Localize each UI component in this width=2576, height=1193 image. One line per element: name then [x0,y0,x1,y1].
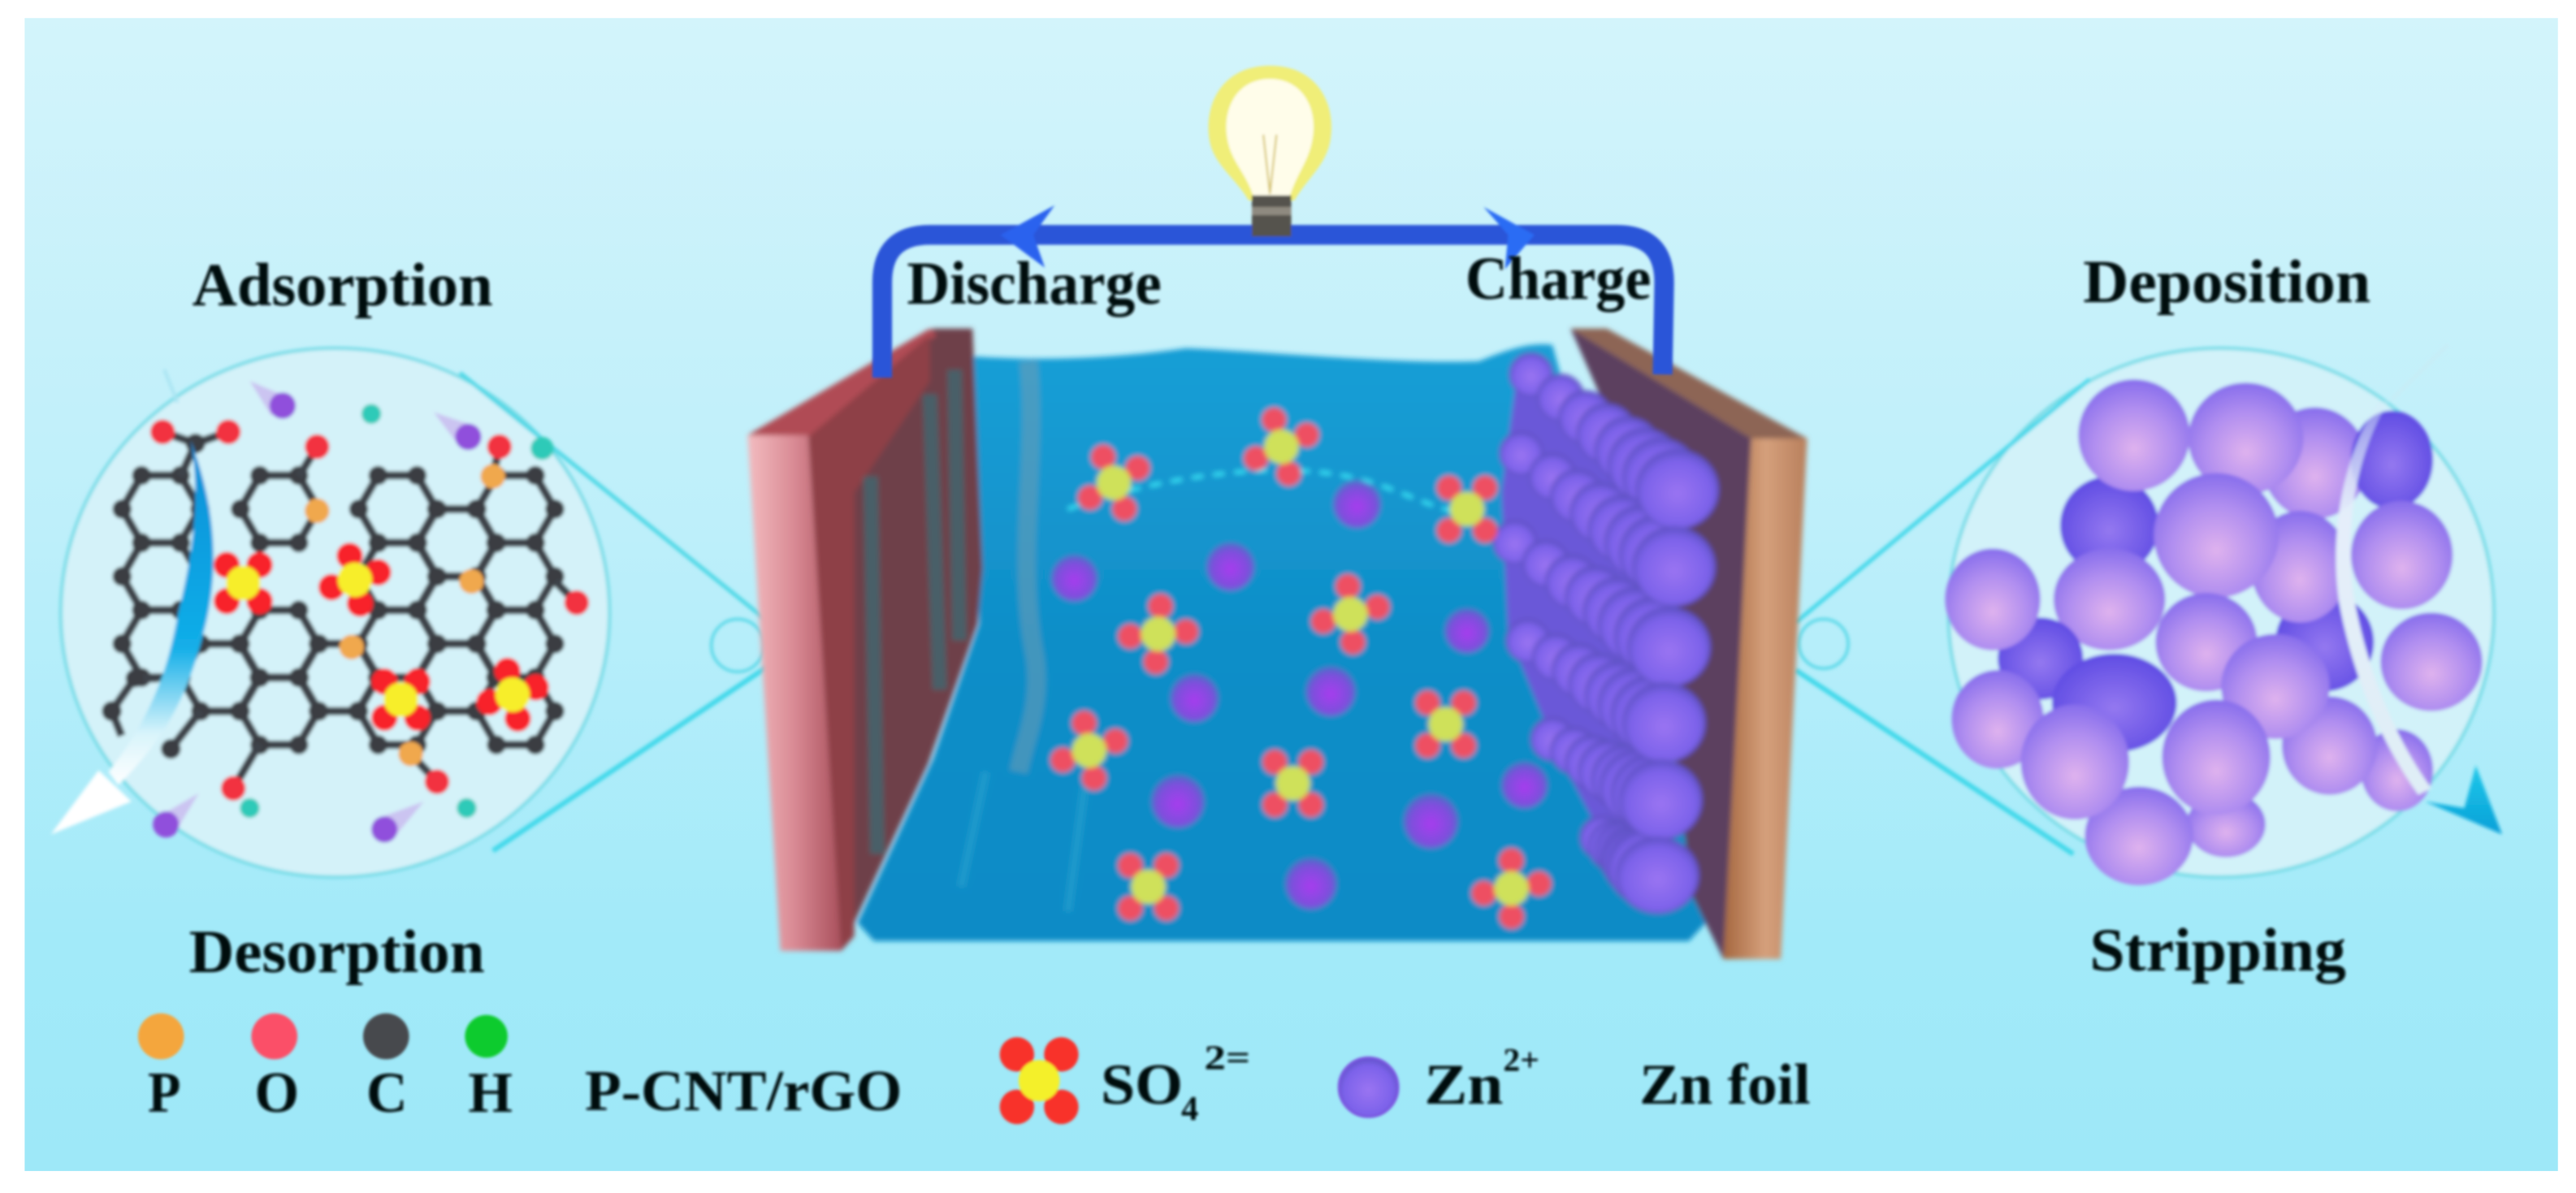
electrolyte streaks [961,361,1462,911]
legend: SO4 2-: SO [1101,1053,1183,1117]
phosphorus atoms [305,464,505,766]
legend: oxygen [251,1014,299,1125]
battery cell [747,328,1808,959]
legend: phosphorus: P [148,1061,180,1125]
arrow: charge direction [1483,207,1535,270]
legend: Zn2+ [1424,1042,1539,1117]
right magnified view: zinc deposition [1795,345,2502,885]
hexagonal lattice [102,432,577,789]
legend: oxygen: O [254,1061,299,1125]
text labels [189,245,2370,986]
legend: phosphorus [138,1014,184,1125]
legend: SO4 2-: 4 [1181,1090,1198,1128]
magnifier circle [1948,348,2494,877]
label: Stripping: Stripping [2089,917,2346,984]
sulfate ions in electrolyte [1046,404,1556,934]
zinc deposit array [1493,353,1718,913]
legend: SO4 2-: 2= [1204,1040,1250,1078]
left electrode: P-CNT/rGO [747,328,982,951]
label: Desorption: Desorption [189,919,485,986]
right electrode: Zn foil [1570,328,1808,959]
adsorbed sulfate ions [214,538,554,737]
arrow: discharge direction [1001,205,1054,268]
legend: sulfate icon [1000,1037,1079,1124]
callout tail to right electrode [1795,379,2089,854]
label: Adsorption: Adsorption [193,252,493,319]
zinc spheres [1945,379,2483,885]
external circuit with bulb [882,66,1665,378]
legend: zinc ion icon [1339,1057,1398,1117]
zinc ions in electrolyte [1051,481,1548,909]
electrolyte [858,344,1708,941]
circuit wire [882,235,1665,378]
label: Discharge: Discharge [907,250,1162,318]
legend: Zn2+: Zn [1424,1053,1503,1117]
legend: carbon [363,1014,409,1125]
legend: Zn foil: Zn foil [1639,1053,1811,1117]
adsorption arrow [51,370,214,834]
legend [138,1014,1811,1128]
zinc ions with tails [153,381,482,842]
label: Deposition: Deposition [2083,249,2370,316]
light bulb [1209,66,1331,236]
magnifier circle [61,348,609,877]
label: Charge: Charge [1466,245,1651,313]
callout tail to left electrode [460,373,767,851]
legend: hydrogen [465,1015,513,1125]
legend: carbon: C [366,1061,408,1125]
legend: hydrogen: H [468,1061,513,1125]
stripping arrow [2336,345,2502,834]
oxygen atoms [150,420,589,801]
legend: Zn2+: 2+ [1503,1042,1539,1078]
legend: P-CNT/rGO: P-CNT/rGO [585,1060,902,1123]
legend: SO4 2- [1101,1040,1250,1128]
hydrogen atoms [240,404,554,818]
left magnified view: graphene adsorption [51,348,767,877]
